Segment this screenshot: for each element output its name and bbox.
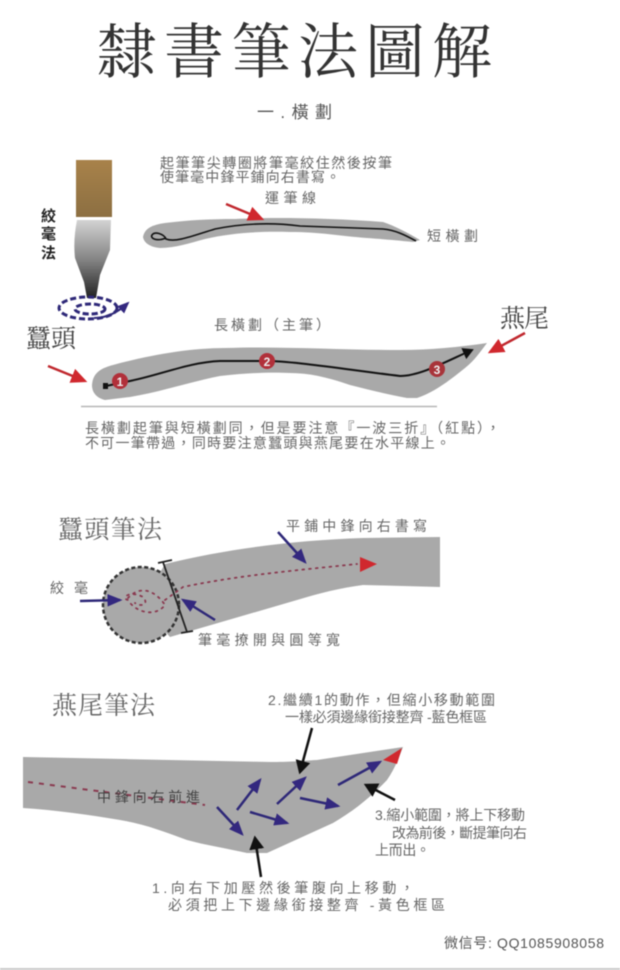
point 3: [429, 361, 445, 377]
heading: silkworm head technique: 蠶頭筆法: [58, 516, 163, 544]
icon: twisting brush: [59, 160, 128, 319]
point 2: [259, 353, 275, 369]
label: width note: 筆毫撩開與圓等寬: [198, 632, 340, 648]
text: step 3: 3.縮小範圍，將上下移動: [375, 807, 525, 823]
panel: short horizontal stroke instructions: [160, 155, 392, 185]
text: long stroke notes: 長橫劃起筆與短橫劃同，但是要注意『一波三折』（紅點），: [85, 420, 500, 436]
watermark: 微信号: QQ1085908058: [444, 935, 604, 951]
text: step 3: 改為前後，斷提筆向右: [392, 825, 527, 841]
brush handle: [76, 160, 112, 217]
label: twisting method: 毫: [41, 225, 56, 243]
label: centered tip: 平鋪中鋒向右書寫: [286, 518, 427, 534]
label: twisting method: [41, 207, 56, 262]
navy arrow left: [80, 600, 120, 601]
text: long stroke notes: 不可一筆帶過，同時要注意蠶頭與燕尾要在水平線上。: [85, 435, 450, 451]
point 2: 2: [264, 355, 271, 369]
red tip: [383, 748, 402, 764]
start square: [103, 383, 108, 389]
brush path line: [152, 224, 416, 241]
divider bar: [158, 560, 193, 633]
text: step 3: [375, 807, 527, 858]
label: twisting: 絞毫: [50, 580, 88, 596]
black arrows: [255, 728, 395, 877]
red arrow: [226, 204, 262, 219]
panel: silkworm head diagram: [80, 532, 440, 643]
label: long stroke: 長橫劃（主筆）: [214, 317, 330, 333]
brush hair: [74, 220, 111, 298]
text: step 2: 一樣必須邊緣銜接整齊 -藍色框區: [285, 709, 487, 725]
label: twisting method: 絞: [41, 207, 56, 225]
navy arrows: [217, 762, 380, 834]
text: short stroke instructions: 起筆筆尖轉圈將筆毫絞住然後按筆: [160, 155, 392, 171]
label: silkworm head: 蠶頭: [26, 325, 77, 353]
stroke body: [141, 537, 440, 637]
dashed path: [28, 782, 205, 805]
arrow: to silkworm head: [48, 366, 85, 381]
title: 隸書筆法圖解: [97, 20, 492, 86]
red triangle: [360, 557, 377, 572]
short horizontal stroke: [143, 204, 420, 248]
label: twisting method: 法: [41, 244, 56, 262]
text: step 1: 必須把上下邊緣銜接整齊 -黃色框區: [168, 897, 445, 913]
head circle: [103, 567, 179, 643]
subtitle: horizontal stroke: 一.橫劃: [257, 103, 332, 122]
text: step 1: 1.向右下加壓然後筆腹向上移動，: [152, 880, 414, 896]
navy arrow lower right: [183, 600, 215, 620]
label: centered tip advancing: 中鋒向右前進: [97, 789, 200, 805]
text: short stroke instructions line 2: 使筆毫中鋒平鋪向右書寫。: [160, 169, 340, 185]
label: short stroke: 短橫劃: [427, 228, 478, 244]
text: step 2: 2.繼續1的動作，但縮小移動範圍: [268, 692, 495, 708]
long horizontal stroke: [92, 343, 487, 400]
text: long stroke notes: [85, 420, 500, 451]
point 1: 1: [117, 375, 124, 389]
stroke body: [92, 343, 487, 400]
brush twist dashes: [59, 297, 128, 319]
point 1: [112, 373, 128, 389]
navy arrow top: [278, 532, 305, 562]
point 3: 3: [434, 363, 441, 377]
dotted path: [125, 564, 357, 612]
label: swallow tail: 燕尾: [500, 305, 549, 333]
panel: swallow tail diagram: [23, 728, 403, 877]
stroke body: [143, 218, 420, 248]
arrow: to swallow tail: [490, 333, 525, 352]
label: brush path: 運筆線: [265, 190, 316, 206]
brush path line with arrow: [106, 350, 472, 386]
stroke body: [23, 747, 403, 853]
text: step 1: [152, 880, 445, 913]
text: step 3: 上而出。: [375, 842, 430, 858]
heading: swallow tail technique: 燕尾筆法: [52, 692, 156, 720]
text: step 2: [268, 692, 495, 725]
